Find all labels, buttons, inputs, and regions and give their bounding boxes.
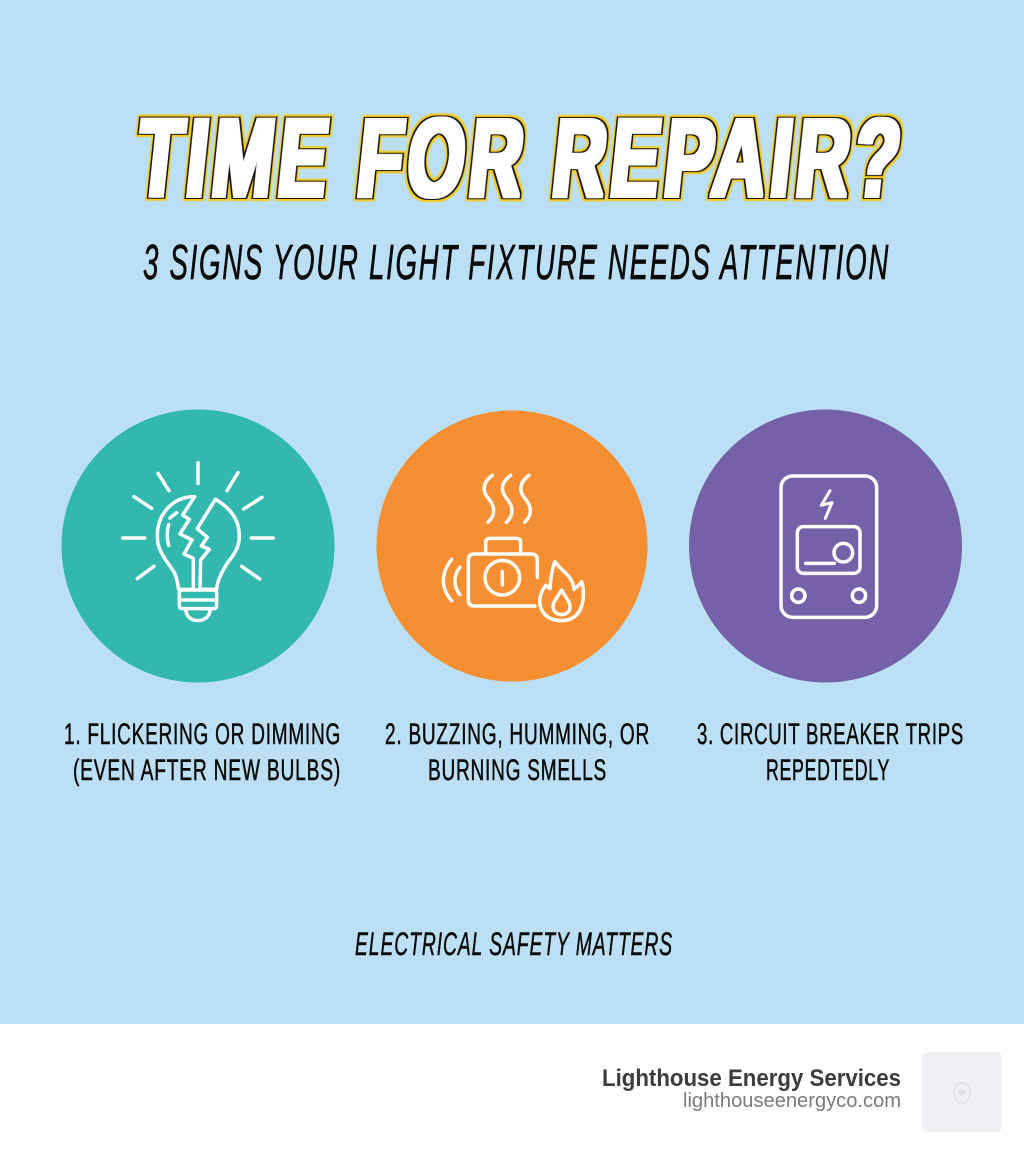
icon: buzzing burning device bbox=[443, 475, 583, 621]
label: sign 3: REPEDTEDLY bbox=[766, 754, 890, 787]
label: sign 2 bbox=[385, 718, 650, 787]
panel: sign 3 breaker bbox=[689, 410, 964, 787]
teal circle bbox=[62, 410, 334, 682]
orange circle bbox=[376, 410, 648, 682]
label: sign 1: 1. FLICKERING OR DIMMING bbox=[64, 718, 341, 751]
label: sign 1: (EVEN AFTER NEW BULBS) bbox=[73, 754, 341, 787]
icon: cracked light bulb bbox=[123, 463, 273, 621]
company url: lighthouseenergyco.com bbox=[683, 1090, 901, 1112]
panel: sign 2 buzzing bbox=[376, 410, 650, 787]
label: sign 3 bbox=[697, 718, 964, 787]
icon: circuit breaker panel bbox=[781, 476, 877, 617]
purple circle bbox=[689, 410, 962, 682]
label: sign 2: BURNING SMELLS bbox=[428, 754, 607, 787]
label: sign 1 bbox=[64, 718, 341, 787]
closing tagline: ELECTRICAL SAFETY MATTERS bbox=[355, 926, 673, 962]
footer bar bbox=[0, 1024, 1024, 1154]
panel: sign 1 flickering bbox=[62, 410, 341, 787]
label: sign 2: 2. BUZZING, HUMMING, OR bbox=[385, 718, 650, 751]
logo tile bbox=[922, 1052, 1002, 1132]
company name: Lighthouse Energy Services bbox=[602, 1065, 901, 1092]
icon: logo mark bbox=[954, 1083, 970, 1103]
